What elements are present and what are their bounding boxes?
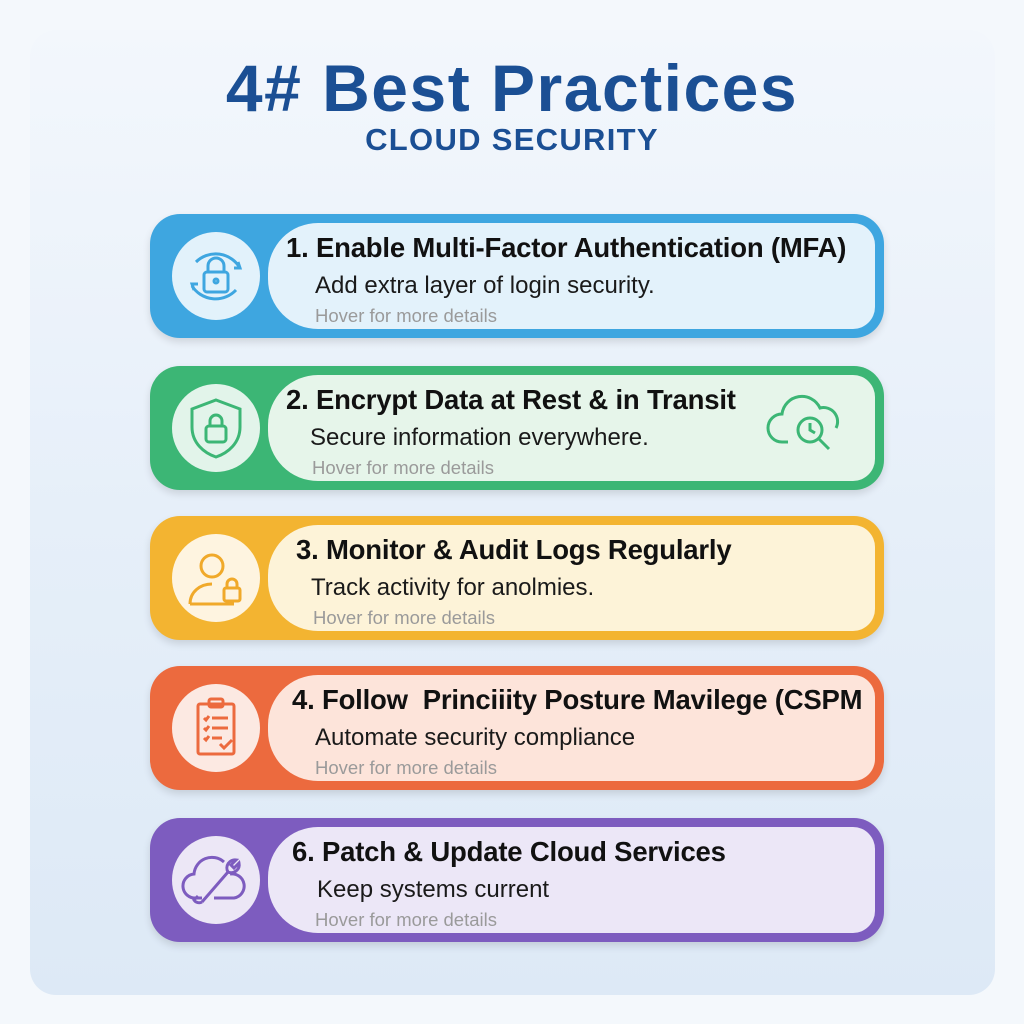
- text: 3. Monitor & Audit Logs Regularly: [296, 534, 731, 565]
- card 2: Encrypt: [150, 366, 884, 490]
- text: 6. Patch & Update Cloud Services: [292, 836, 726, 867]
- card 5: Patch: Keep systems current: [317, 876, 549, 903]
- card 2: Encrypt: Hover for more details: [312, 457, 494, 478]
- icon: cloud search: [766, 394, 840, 450]
- text: 2. Encrypt Data at Rest & in Transit: [286, 384, 736, 415]
- card 4: CSPM: Hover for more details: [315, 757, 497, 778]
- card 4: CSPM: [150, 666, 884, 790]
- card 3: Monitor: Hover for more details: [313, 607, 495, 628]
- icon: cloud wrench: [172, 836, 260, 924]
- icon: checklist clipboard: [172, 684, 260, 772]
- card 1: MFA: Hover for more details: [315, 305, 497, 326]
- card 1: MFA: Add extra layer of login security.: [315, 272, 655, 299]
- icon: shield lock: [172, 384, 260, 472]
- title: 4# Best Practices: [226, 51, 798, 125]
- text: 1. Enable Multi-Factor Authentication (MFA): [286, 232, 846, 263]
- card 3: Monitor: Track activity for anolmies.: [311, 574, 594, 601]
- icon: user lock: [172, 534, 260, 622]
- card 5: Patch: Hover for more details: [315, 909, 497, 930]
- card 5: Patch: [150, 818, 884, 942]
- subtitle: CLOUD SECURITY: [365, 122, 659, 157]
- card 3: Monitor: [150, 516, 884, 640]
- text: 4. Follow Princiiity Posture Mavilege (CSPM: [292, 684, 862, 715]
- card 4: CSPM: Automate security compliance: [315, 724, 635, 751]
- card 2: Encrypt: Secure information everywhere.: [310, 424, 649, 451]
- icon: lock with arrows: [172, 232, 260, 320]
- card 1: MFA: [150, 214, 884, 338]
